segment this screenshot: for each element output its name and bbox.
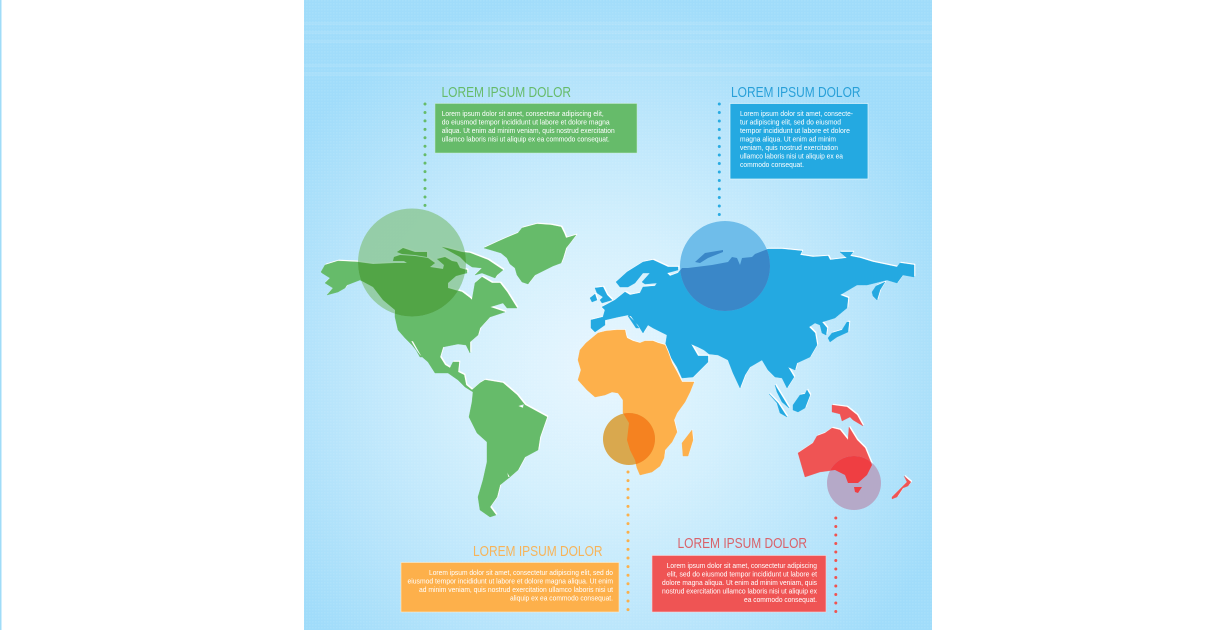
panel: red text box: [652, 556, 826, 612]
circle marker: orange: [603, 413, 655, 465]
panel: blue text box: [730, 104, 868, 179]
panel: orange text box: ad minim veniam, quis nostrud exercitation ullamco laboris nisi ut: [419, 585, 614, 594]
panel: blue text box: tempor incididunt ut labore et dolore: [740, 126, 850, 135]
panel: orange text box: Lorem ipsum dolor sit amet, consectetur adipiscing elit, sed do: [429, 568, 613, 577]
panel: blue text box: ullamco laboris nisi ut aliquip ex ea: [740, 151, 844, 160]
panel: green text box: Lorem ipsum dolor sit amet, consectetur adipiscing elit,: [442, 109, 604, 118]
heading: blue: LOREM IPSUM DOLOR: [731, 84, 861, 101]
dotted leader: red: [834, 518, 837, 612]
continent: Americas and Greenland: [321, 223, 577, 517]
dotted leader: blue: [718, 104, 721, 217]
heading: red: LOREM IPSUM DOLOR: [678, 535, 807, 552]
panel: orange text box: aliquip ex ea commodo consequat.: [510, 594, 613, 603]
panel: green text box: ullamco laboris nisi ut aliquip ex ea commodo consequat.: [442, 135, 610, 144]
continent: Africa: [578, 329, 695, 475]
panel: red text box: Lorem ipsum dolor sit amet, consectetur adipiscing: [667, 561, 817, 570]
panel: red text box: nostrud exercitation ullamco laboris nisi ut aliquip ex: [662, 587, 817, 596]
panel: green text box: [435, 104, 637, 153]
panel: green text box: do eiusmod tempor incididunt ut labore et dolore magna: [442, 118, 610, 127]
panel: blue text box: tur adipiscing elit, sed do eiusmod: [740, 118, 841, 126]
panel: red text box: elit, sed do eiusmod tempor incididunt ut labore et: [667, 570, 818, 579]
panel: blue text box: commodo consequat.: [740, 160, 804, 169]
left edge line: [0, 0, 2, 630]
panel: blue text box: Lorem ipsum dolor sit amet, consecte-: [740, 109, 853, 118]
panel: red text box: dolore magna aliqua. Ut enim ad minim veniam, quis: [662, 578, 817, 587]
continent: Eurasia: [590, 248, 915, 417]
dotted leader: green: [424, 104, 426, 207]
background panel: [304, 0, 932, 630]
circle marker: blue: [680, 221, 770, 311]
circle marker: green: [358, 208, 466, 316]
panel: orange text box: eiusmod tempor incididunt ut labore et dolore magna aliqua. Ut enim: [408, 577, 613, 586]
heading: orange: LOREM IPSUM DOLOR: [473, 543, 603, 560]
panel: blue text box: magna aliqua. Ut enim ad minim: [740, 134, 836, 144]
panel: blue text box: veniam, quis nostrud exercitation: [740, 143, 838, 152]
panel: red text box: ea commodo consequat.: [744, 595, 817, 604]
panel: orange text box: [401, 562, 619, 612]
panel: green text box: aliqua. Ut enim ad minim veniam, quis nostrud exercitation: [442, 126, 615, 135]
continent: Oceania: [798, 404, 912, 499]
circle marker: red: [827, 456, 881, 510]
heading: green: LOREM IPSUM DOLOR: [442, 84, 571, 101]
dotted leader: orange: [626, 472, 630, 613]
